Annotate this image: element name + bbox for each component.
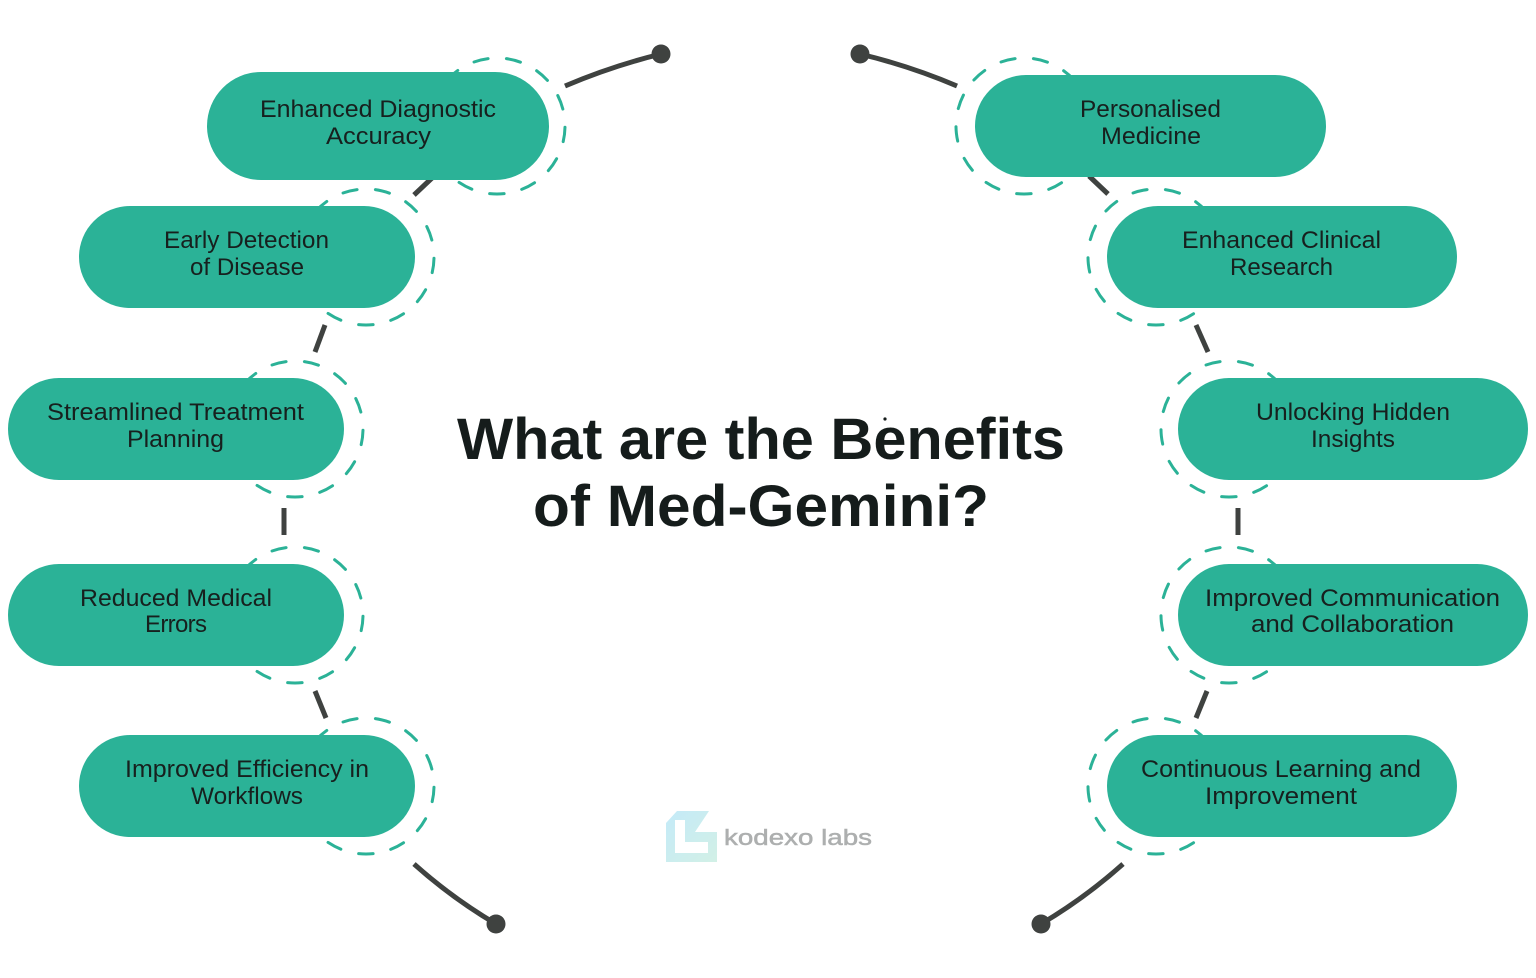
connector: right 1 to 2 — [1089, 176, 1108, 194]
connector: left 4 to 5 — [315, 691, 326, 718]
item: Enhanced Clinical Research — [1081, 182, 1457, 332]
item: Unlocking Hidden Insights: Insights — [1311, 426, 1395, 453]
item: Continuous Learning and Improvement: Continuous Learning and — [1141, 756, 1421, 783]
item: Continuous Learning and Improvement: Improvement — [1205, 783, 1357, 810]
title — [457, 407, 1065, 539]
item: Personalised Medicine — [949, 51, 1326, 201]
item: Enhanced Clinical Research: Research — [1230, 254, 1333, 281]
connector: bottom right curve — [1032, 864, 1123, 934]
item: Enhanced Clinical Research: Enhanced Clinical — [1182, 227, 1381, 254]
item: Early Detection of Disease: Early Detection — [164, 227, 329, 254]
item: Reduced Medical Errors: Reduced Medical — [80, 585, 272, 612]
item: Enhanced Diagnostic Accuracy — [207, 51, 572, 201]
connector: left 3 to 4 — [282, 508, 286, 535]
item: Personalised Medicine: Medicine — [1101, 123, 1201, 150]
item: Early Detection of Disease — [79, 182, 441, 332]
connector: left 1 to 2 — [414, 178, 432, 195]
item: Streamlined Treatment Planning — [8, 354, 370, 504]
title: of Med-Gemini? — [533, 474, 989, 539]
connector: right 3 to 4 — [1236, 508, 1240, 535]
item: Unlocking Hidden Insights: Unlocking Hidden — [1256, 399, 1450, 426]
item: Improved Communication and Collaboration: and Collaboration — [1251, 611, 1454, 638]
item: Early Detection of Disease: of Disease — [190, 254, 304, 281]
item: Streamlined Treatment Planning: Planning — [127, 426, 224, 453]
connector: top left curve — [565, 44, 670, 86]
item: Improved Efficiency in Workflows — [79, 711, 441, 861]
connector: left 2 to 3 — [315, 325, 325, 352]
item: Streamlined Treatment Planning: Streamlined Treatment — [47, 399, 304, 426]
logo: kodexo labs — [666, 811, 872, 862]
logo: kodexo labs: kodexo labs — [724, 825, 872, 850]
item: Reduced Medical Errors — [8, 540, 370, 690]
item: Improved Communication and Collaboration — [1154, 540, 1528, 690]
item: Improved Communication and Collaboration: Improved Communication — [1205, 585, 1500, 612]
item: Reduced Medical Errors: Errors — [145, 611, 207, 638]
item: Improved Efficiency in Workflows: Improved Efficiency in — [125, 756, 369, 783]
connector: top right curve — [850, 44, 957, 86]
item: Enhanced Diagnostic Accuracy: Accuracy — [326, 123, 431, 150]
connector: bottom left curve — [414, 864, 506, 934]
title: What are the Benefits — [457, 407, 1065, 472]
item: Continuous Learning and Improvement — [1081, 711, 1457, 861]
item: Enhanced Diagnostic Accuracy: Enhanced Diagnostic — [260, 96, 496, 123]
item: Improved Efficiency in Workflows: Workflows — [191, 783, 303, 810]
item: Personalised Medicine: Personalised — [1080, 96, 1221, 123]
connector: right 2 to 3 — [1196, 325, 1208, 352]
item: Unlocking Hidden Insights — [1154, 354, 1528, 504]
connector: right 4 to 5 — [1196, 691, 1207, 718]
